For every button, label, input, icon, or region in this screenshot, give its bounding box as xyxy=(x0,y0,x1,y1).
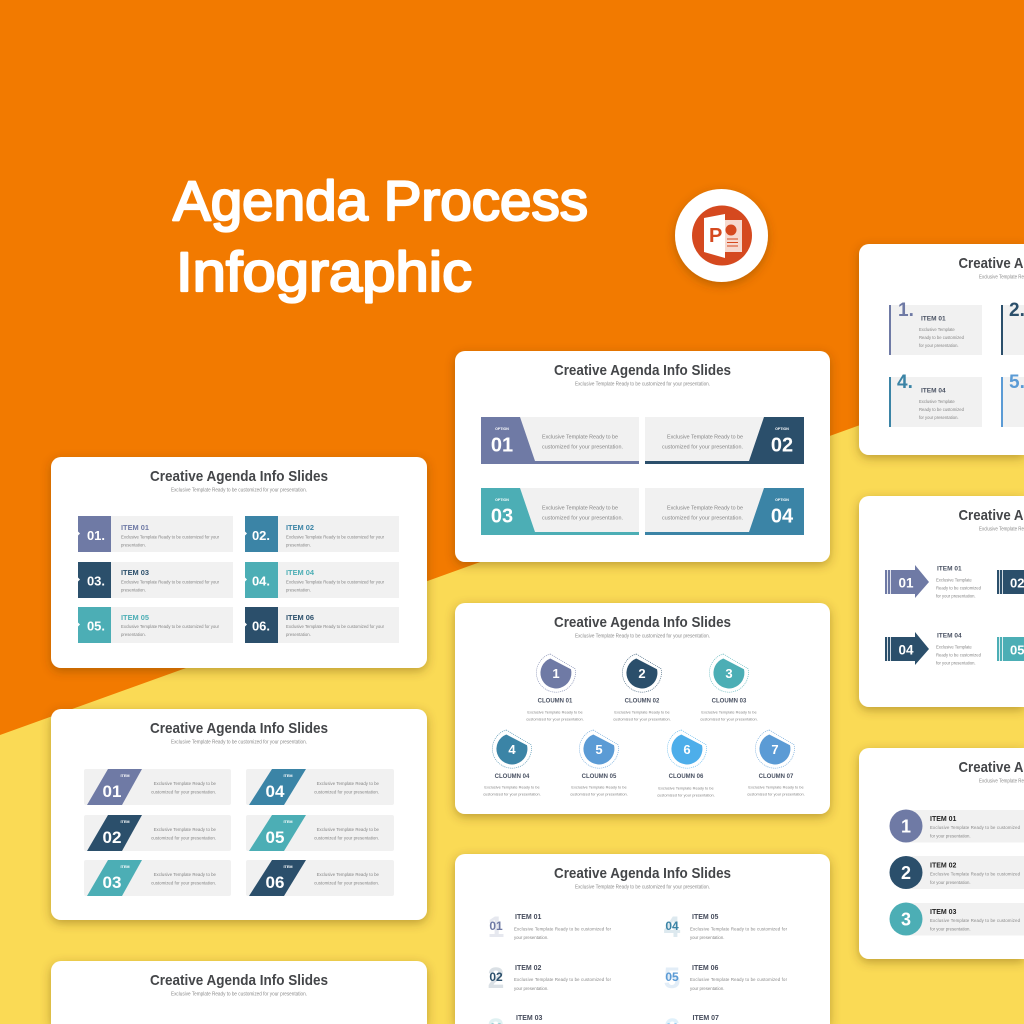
panel: numbered tiles with items 01-06: Exclusive Template Ready to be customized for your xyxy=(286,624,385,629)
panel: seven columns with badge icons: 2 xyxy=(638,666,646,681)
panel: parallelogram items 01-06 xyxy=(51,709,427,920)
panel: parallelogram items 01-06: 04 xyxy=(266,782,285,801)
panel: bar-marked items, cropped at right xyxy=(859,244,1024,455)
panel: seven columns with badge icons: 7 xyxy=(771,742,779,757)
panel: numbered tiles with items 01-06 xyxy=(51,457,427,668)
panel: circle items, cropped at right: 3 xyxy=(901,910,911,930)
panel: parallelogram items 01-06: 06 xyxy=(266,873,284,892)
panel: seven columns with badge icons: customized for your presentation. xyxy=(657,792,715,798)
panel: seven columns with badge icons: Exclusive Template Ready to be xyxy=(614,710,670,714)
panel: parallelogram items 01-06: Creative Agenda Info Slides xyxy=(150,720,328,737)
panel: option banners 01-04: Exclusive Template Ready to be xyxy=(667,506,743,512)
panel: seven columns with badge icons: 1 xyxy=(552,666,560,681)
panel: bottom-left slide, cropped: Exclusive Template Ready to be customized for your presentation. xyxy=(171,992,307,998)
panel: parallelogram items 01-06: Exclusive Template Ready to be customized for your presentation. xyxy=(171,740,307,746)
panel: numbered tiles with items 01-06: 02. xyxy=(252,528,270,543)
panel: numbered tiles with items 01-06: presentation. xyxy=(286,632,311,637)
panel: option banners 01-04: 01 xyxy=(491,434,513,456)
panel: numbered list items, cropped: 2 xyxy=(488,962,504,995)
panel: parallelogram items 01-06: customized for your presentation. xyxy=(314,836,379,840)
panel: bar-marked items, cropped at right: ITEM 01 xyxy=(921,316,946,322)
panel: numbered tiles with items 01-06: presentation. xyxy=(121,542,146,548)
panel: numbered list items, cropped xyxy=(455,854,830,1024)
panel: seven columns with badge icons: CLOUMN 02 xyxy=(625,698,660,704)
panel: numbered tiles with items 01-06: ITEM 02 xyxy=(286,523,314,532)
panel: bar-marked items, cropped at right: 1. xyxy=(898,300,914,321)
panel: numbered tiles with items 01-06: presentation. xyxy=(286,588,311,592)
panel: numbered list items, cropped: ITEM 06 xyxy=(692,965,719,972)
panel: circle items, cropped at right: 2 xyxy=(901,863,911,883)
panel: parallelogram items 01-06: 05 xyxy=(266,828,284,847)
panel: parallelogram items 01-06: customized for your presentation. xyxy=(151,880,216,886)
panel: arrow items, cropped at right: Exclusive Template xyxy=(936,578,972,582)
panel: numbered tiles with items 01-06: ITEM 05 xyxy=(121,613,149,622)
panel: numbered list items, cropped: your presentation. xyxy=(690,935,724,940)
panel: circle items, cropped at right: for your presentation. xyxy=(930,926,971,932)
panel: numbered list items, cropped: 02 xyxy=(489,970,503,984)
panel: option banners 01-04: OPTION xyxy=(495,427,509,431)
panel: option banners 01-04: customized for your presentation. xyxy=(662,444,743,450)
panel: parallelogram items 01-06: ITEM xyxy=(120,774,130,778)
panel: option banners 01-04: customized for your presentation. xyxy=(542,516,623,522)
panel: circle items, cropped at right: Exclusive Template Ready to be customized xyxy=(930,825,1021,830)
panel: parallelogram items 01-06: customized for your presentation. xyxy=(314,790,379,794)
panel: numbered tiles with items 01-06: Exclusive Template Ready to be customized for your xyxy=(286,580,385,584)
panel: parallelogram items 01-06: ITEM xyxy=(120,865,130,869)
panel: numbered list items, cropped: Exclusive Template Ready to be customized for xyxy=(690,926,788,932)
panel: option banners 01-04: 04 xyxy=(771,506,794,528)
panel: numbered tiles with items 01-06: Exclusive Template Ready to be customized for your xyxy=(121,624,220,629)
panel: circle items, cropped at right: ITEM 03 xyxy=(930,909,957,916)
panel: bar-marked items, cropped at right: ITEM 04 xyxy=(921,388,946,394)
panel: circle items, cropped at right xyxy=(859,748,1024,959)
panel: numbered list items, cropped: 5 xyxy=(664,962,680,995)
panel: numbered tiles with items 01-06: 06. xyxy=(252,618,270,634)
panel: bottom-left slide, cropped: Creative Agenda Info Slides xyxy=(150,972,328,989)
panel: seven columns with badge icons: customized for your presentation. xyxy=(613,716,671,722)
panel: numbered list items, cropped: your presentation. xyxy=(690,986,724,991)
panel: parallelogram items 01-06: 02 xyxy=(103,828,121,847)
panel: seven columns with badge icons: Exclusive Template Ready to be xyxy=(658,786,714,790)
panel: numbered list items, cropped: 04 xyxy=(665,919,679,933)
panel: numbered list items, cropped: your presentation. xyxy=(514,986,548,991)
panel: arrow items, cropped at right: Ready to be customized xyxy=(936,652,982,658)
panel: seven columns with badge icons: Exclusive Template Ready to be xyxy=(701,710,757,714)
panel: numbered tiles with items 01-06: ITEM 03 xyxy=(121,568,149,577)
panel: seven columns with badge icons: Exclusive Template Ready to be xyxy=(571,784,627,790)
panel: parallelogram items 01-06: customized for your presentation. xyxy=(151,790,216,794)
panel: seven columns with badge icons: CLOUMN 01 xyxy=(538,698,573,704)
panel: circle items, cropped at right: Exclusive Template Ready to be customized xyxy=(930,918,1021,923)
panel: option banners 01-04: customized for your presentation. xyxy=(542,444,623,450)
panel: numbered tiles with items 01-06: 04. xyxy=(252,574,270,588)
panel: parallelogram items 01-06: Exclusive Template Ready to be xyxy=(154,827,217,832)
panel: bar-marked items, cropped at right: for your presentation. xyxy=(919,415,959,420)
panel: parallelogram items 01-06: ITEM xyxy=(120,820,130,824)
panel: numbered list items, cropped: Exclusive Template Ready to be customized for xyxy=(690,977,788,982)
panel: option banners 01-04: Exclusive Template Ready to be customized for your presentation. xyxy=(575,382,710,388)
panel: bar-marked items, cropped at right: for your presentation. xyxy=(919,343,959,348)
panel: seven columns with badge icons: CLOUMN 06 xyxy=(669,774,704,780)
panel: numbered list items, cropped: Exclusive Template Ready to be customized for your presentation. xyxy=(575,884,710,890)
panel: arrow items, cropped at right: Exclusive Template xyxy=(936,644,972,650)
panel: parallelogram items 01-06: ITEM xyxy=(283,865,293,869)
panel: numbered tiles with items 01-06: Creative Agenda Info Slides xyxy=(150,468,328,485)
panel: numbered list items, cropped: ITEM 07 xyxy=(692,1015,719,1022)
panel: seven columns with badge icons: Exclusive Template Ready to be xyxy=(527,710,583,714)
panel: parallelogram items 01-06: 01 xyxy=(103,782,121,801)
panel: arrow items, cropped at right: for your presentation. xyxy=(936,660,976,666)
panel: parallelogram items 01-06: customized for your presentation. xyxy=(151,836,216,840)
panel: seven columns with badge icons: CLOUMN 05 xyxy=(582,774,617,780)
title: Agenda Process xyxy=(173,169,588,232)
panel: numbered tiles with items 01-06: Exclusive Template Ready to be customized for your xyxy=(121,534,220,540)
panel: arrow items, cropped at right: Ready to be customized xyxy=(936,586,982,590)
panel: seven columns with badge icons: 4 xyxy=(508,742,516,757)
panel: parallelogram items 01-06: ITEM xyxy=(283,820,293,824)
panel: option banners 01-04: 02 xyxy=(771,434,793,456)
panel: circle items, cropped at right: 1 xyxy=(901,816,911,836)
panel: parallelogram items 01-06: 03 xyxy=(103,873,121,892)
panel: seven columns with badge icons xyxy=(455,603,830,814)
panel: numbered list items, cropped: ITEM 05 xyxy=(692,914,719,921)
panel: numbered list items, cropped: ITEM 01 xyxy=(515,914,542,921)
panel: arrow items, cropped at right: ITEM 01 xyxy=(937,566,962,572)
panel: numbered list items, cropped: ITEM 03 xyxy=(516,1015,543,1022)
panel: seven columns with badge icons: Exclusive Template Ready to be xyxy=(484,784,540,790)
icon: PowerPoint badge: P xyxy=(709,225,722,247)
panel: seven columns with badge icons: customized for your presentation. xyxy=(747,792,805,796)
panel: parallelogram items 01-06: Exclusive Template Ready to be xyxy=(317,781,380,786)
panel: option banners 01-04: OPTION xyxy=(775,498,789,502)
panel: numbered tiles with items 01-06: presentation. xyxy=(286,542,311,548)
panel: parallelogram items 01-06: Exclusive Template Ready to be xyxy=(317,872,380,877)
panel: option banners 01-04: 03 xyxy=(491,506,513,528)
title xyxy=(173,169,588,303)
panel: seven columns with badge icons: 6 xyxy=(683,742,691,757)
panel: arrow items, cropped at right: 01 xyxy=(898,576,914,590)
panel: circle items, cropped at right: ITEM 02 xyxy=(930,862,957,870)
panel: circle items, cropped at right: ITEM 01 xyxy=(930,816,957,823)
panel: numbered tiles with items 01-06: Exclusive Template Ready to be customized for your presentation. xyxy=(171,488,307,494)
panel: circle items, cropped at right: for your presentation. xyxy=(930,880,971,885)
panel: seven columns with badge icons: customized for your presentation. xyxy=(700,716,758,722)
panel: numbered list items, cropped: Exclusive Template Ready to be customized for xyxy=(514,977,612,982)
panel: seven columns with badge icons: Exclusive Template Ready to be customized for your presentation. xyxy=(575,634,710,640)
panel: option banners 01-04: OPTION xyxy=(775,427,789,431)
panel: seven columns with badge icons: CLOUMN 03 xyxy=(712,698,747,704)
panel: bar-marked items, cropped at right: Exclusive Template xyxy=(919,399,955,404)
panel: numbered list items, cropped: Exclusive Template Ready to be customized for xyxy=(514,926,612,932)
panel: circle items, cropped at right: for your presentation. xyxy=(930,834,971,838)
panel: arrow items, cropped at right xyxy=(859,496,1024,707)
panel: seven columns with badge icons: customized for your presentation. xyxy=(483,792,541,796)
panel: option banners 01-04: Exclusive Template Ready to be xyxy=(542,506,618,512)
panel: numbered tiles with items 01-06: presentation. xyxy=(121,632,146,637)
panel: numbered list items, cropped: 1 xyxy=(488,911,504,944)
panel: numbered tiles with items 01-06: ITEM 04 xyxy=(286,568,315,577)
panel: parallelogram items 01-06: ITEM xyxy=(283,774,293,778)
panel: option banners 01-04: customized for your presentation. xyxy=(662,516,743,522)
panel: numbered list items, cropped: Creative Agenda Info Slides xyxy=(554,865,731,882)
panel: arrow items, cropped at right: ITEM 04 xyxy=(937,632,962,640)
panel: numbered list items, cropped: your presentation. xyxy=(514,935,548,940)
panel: numbered tiles with items 01-06: Exclusive Template Ready to be customized for your xyxy=(121,580,220,584)
panel: seven columns with badge icons: CLOUMN 07 xyxy=(759,774,794,780)
panel: numbered tiles with items 01-06: ITEM 06 xyxy=(286,613,314,622)
title: Infographic xyxy=(176,240,472,303)
panel: arrow items, cropped at right: for your presentation. xyxy=(936,594,976,598)
panel: bar-marked items, cropped at right: Ready to be customized xyxy=(919,335,965,340)
panel: parallelogram items 01-06: Exclusive Template Ready to be xyxy=(317,827,380,832)
panel: numbered tiles with items 01-06: ITEM 01 xyxy=(121,523,149,532)
panel: numbered list items, cropped: ITEM 02 xyxy=(515,965,542,972)
panel: option banners 01-04 xyxy=(455,351,830,562)
panel: seven columns with badge icons: 5 xyxy=(595,742,603,757)
panel: seven columns with badge icons: customized for your presentation. xyxy=(526,716,584,722)
panel: numbered list items, cropped: 05 xyxy=(665,970,679,984)
panel: numbered tiles with items 01-06: 03. xyxy=(87,574,105,588)
icon: PowerPoint badge xyxy=(675,189,768,282)
panel: arrow items, cropped at right: 04 xyxy=(898,642,914,658)
panel: option banners 01-04: Exclusive Template Ready to be xyxy=(667,434,743,440)
panel: seven columns with badge icons: CLOUMN 04 xyxy=(495,774,530,780)
panel: option banners 01-04: OPTION xyxy=(495,498,509,502)
panel: seven columns with badge icons: customized for your presentation. xyxy=(570,792,628,796)
panel: parallelogram items 01-06: Exclusive Template Ready to be xyxy=(154,872,217,877)
panel: bar-marked items, cropped at right: Exclusive Template xyxy=(919,327,955,332)
panel: numbered tiles with items 01-06: 01. xyxy=(87,528,105,543)
panel: bottom-left slide, cropped xyxy=(51,961,427,1024)
panel: numbered tiles with items 01-06: 05. xyxy=(87,618,105,634)
panel: numbered list items, cropped: 01 xyxy=(489,919,503,933)
panel: numbered list items, cropped: 4 xyxy=(664,911,681,944)
panel: seven columns with badge icons: Exclusive Template Ready to be xyxy=(748,784,804,790)
panel: parallelogram items 01-06: Exclusive Template Ready to be xyxy=(154,781,217,786)
panel: numbered tiles with items 01-06: Exclusive Template Ready to be customized for your xyxy=(286,534,385,540)
panel: seven columns with badge icons: Creative Agenda Info Slides xyxy=(554,614,731,631)
panel: numbered tiles with items 01-06: presentation. xyxy=(121,588,146,592)
panel: circle items, cropped at right: Exclusive Template Ready to be customized xyxy=(930,872,1021,876)
panel: parallelogram items 01-06: customized for your presentation. xyxy=(314,880,379,886)
panel: option banners 01-04: Creative Agenda Info Slides xyxy=(554,362,731,379)
panel: bar-marked items, cropped at right: 4. xyxy=(897,372,913,393)
panel: bar-marked items, cropped at right: Ready to be customized xyxy=(919,407,965,412)
panel: option banners 01-04: Exclusive Template Ready to be xyxy=(542,434,618,440)
panel: seven columns with badge icons: 3 xyxy=(725,666,733,681)
